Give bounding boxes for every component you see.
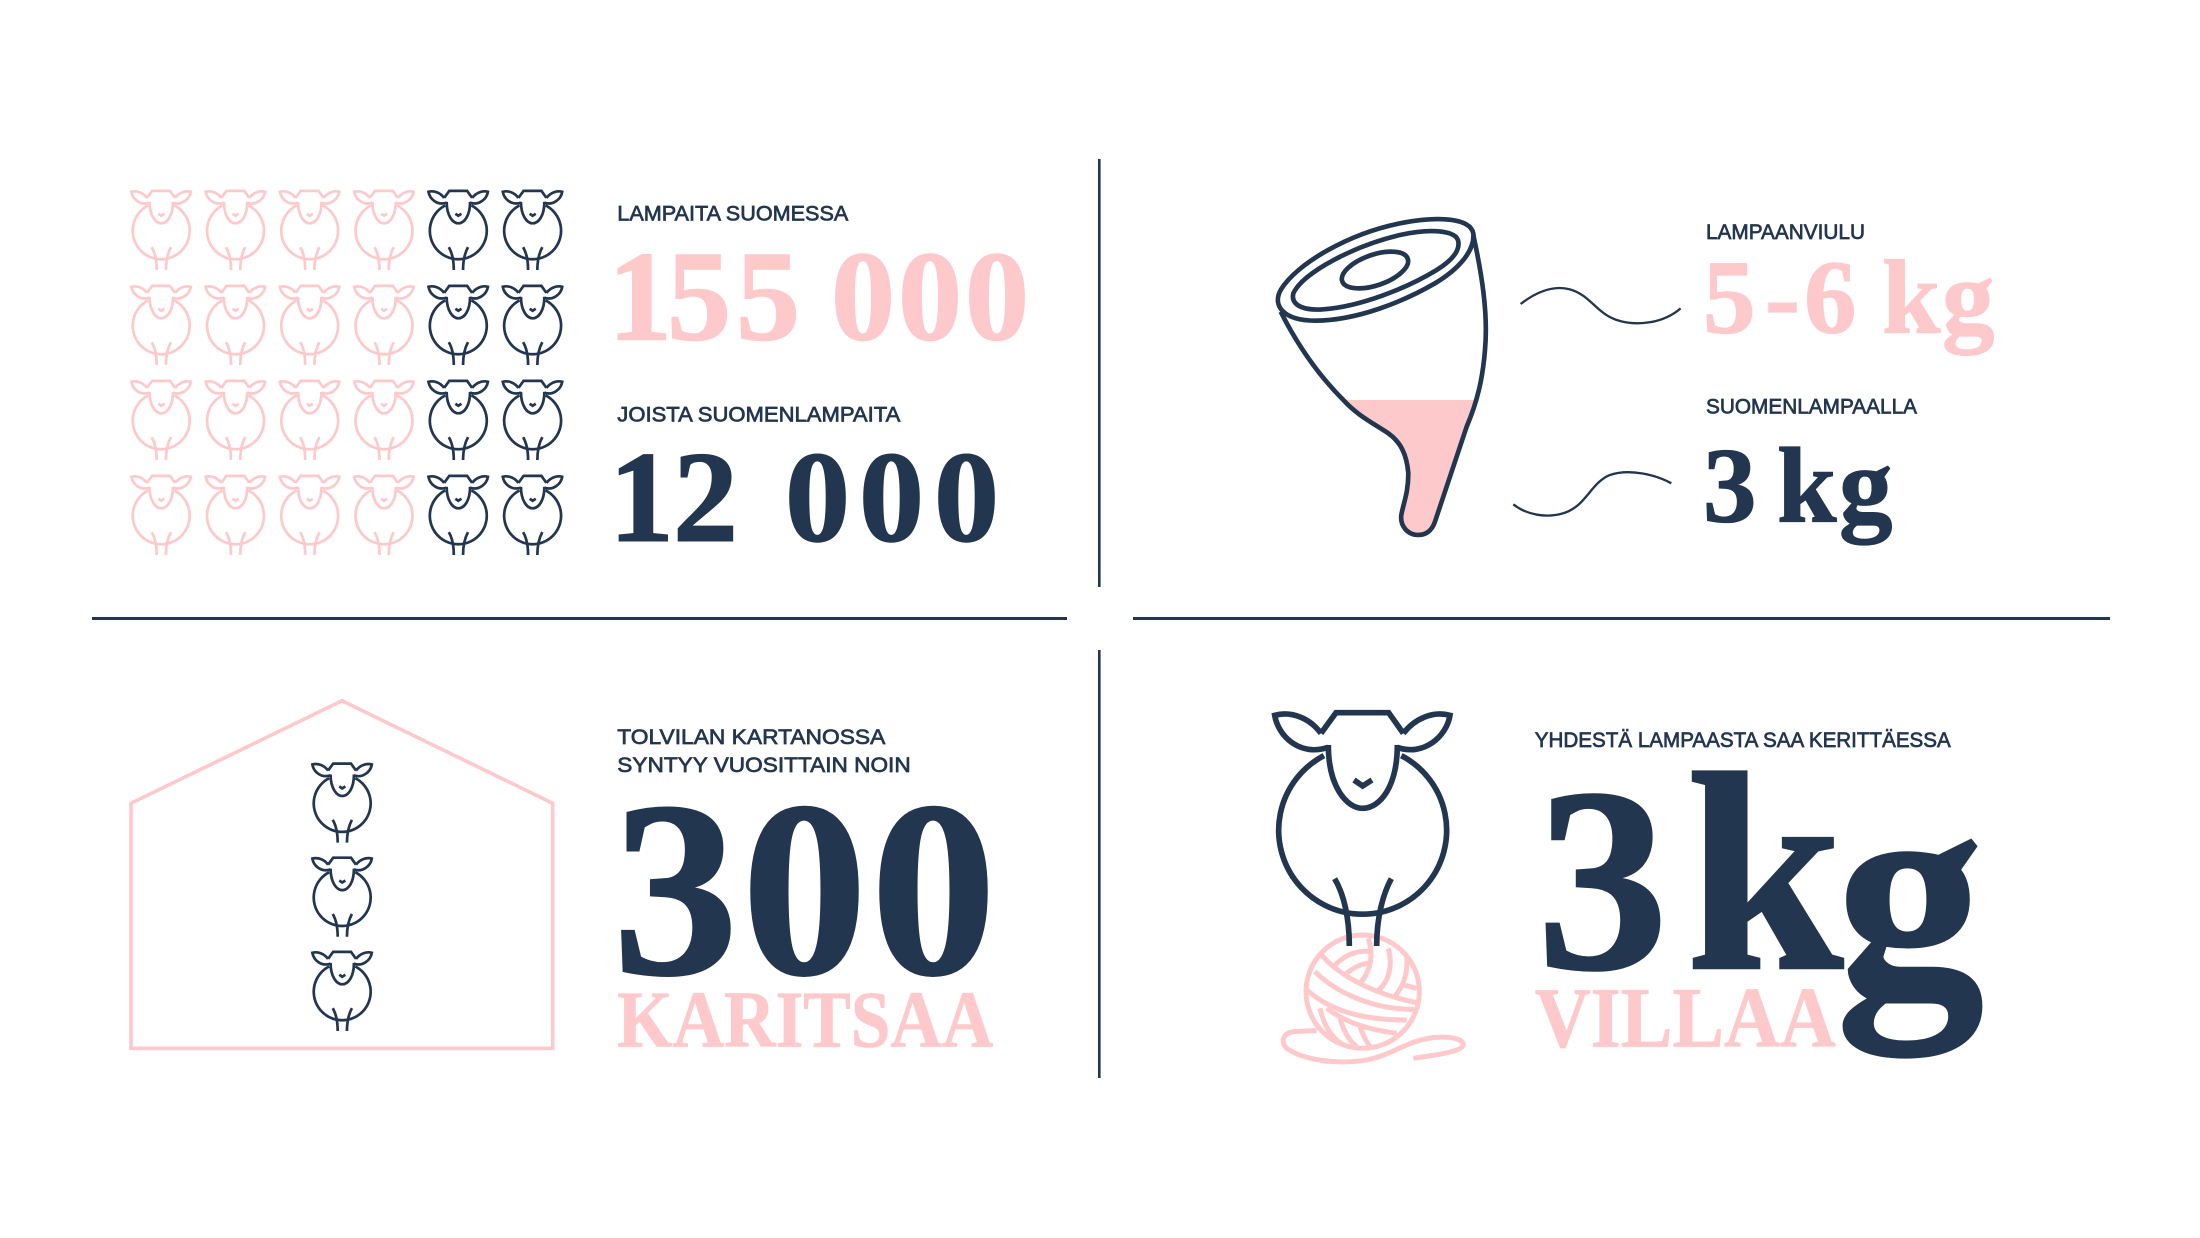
number: 300: 300 [613,751,996,1028]
icon grid: sheep population [131,191,562,555]
number: 3 kg: 3 kg [1703,428,1892,546]
number: 5-6 kg: 5-6 kg [1703,238,1994,355]
panel: sheep in Finland [131,191,1029,570]
label: of which Finnsheep: JOISTA SUOMENLAMPAITA [617,404,900,427]
icon: three sheep [312,764,372,1031]
icon: barn outline [131,701,553,1048]
word: wool: VILLAA [1535,970,1836,1066]
pink sheep columns [131,191,414,555]
connector: upper squiggle [1521,288,1681,323]
dividers [92,159,2110,1078]
navy sheep columns [428,191,562,555]
label: sheep in Finland: LAMPAITA SUOMESSA [617,203,848,226]
label: Finnsheep: SUOMENLAMPAALLA [1706,396,1917,419]
number: 12 000: 12 000 [609,426,999,570]
label: Tolvila manor: TOLVILAN KARTANOSSA [617,726,885,749]
connector: lower squiggle [1513,472,1671,516]
panel: leg of lamb [1278,219,1994,546]
number: 155 000: 155 000 [608,225,1029,367]
number: 3 kg wool: 3 [1537,735,1668,1025]
number: 3 kg wool: g [1836,729,1984,1061]
number: 3 kg wool: k [1686,717,1845,1030]
word: lambs: KARITSAA [617,975,993,1065]
label: born yearly: SYNTYY VUOSITTAIN NOIN [617,754,911,777]
icon: leg of lamb [1278,219,1486,535]
label: leg of lamb: LAMPAANVIULU [1706,221,1865,244]
icon: ball of yarn [1283,935,1463,1062]
panel: lambs at Tolvila manor [131,701,996,1065]
label: per shearing: YHDESTÄ LAMPAASTA SAA KERITTÄESSA [1535,729,1951,752]
panel: wool [1275,713,1984,1066]
icon: large sheep [1275,713,1450,946]
